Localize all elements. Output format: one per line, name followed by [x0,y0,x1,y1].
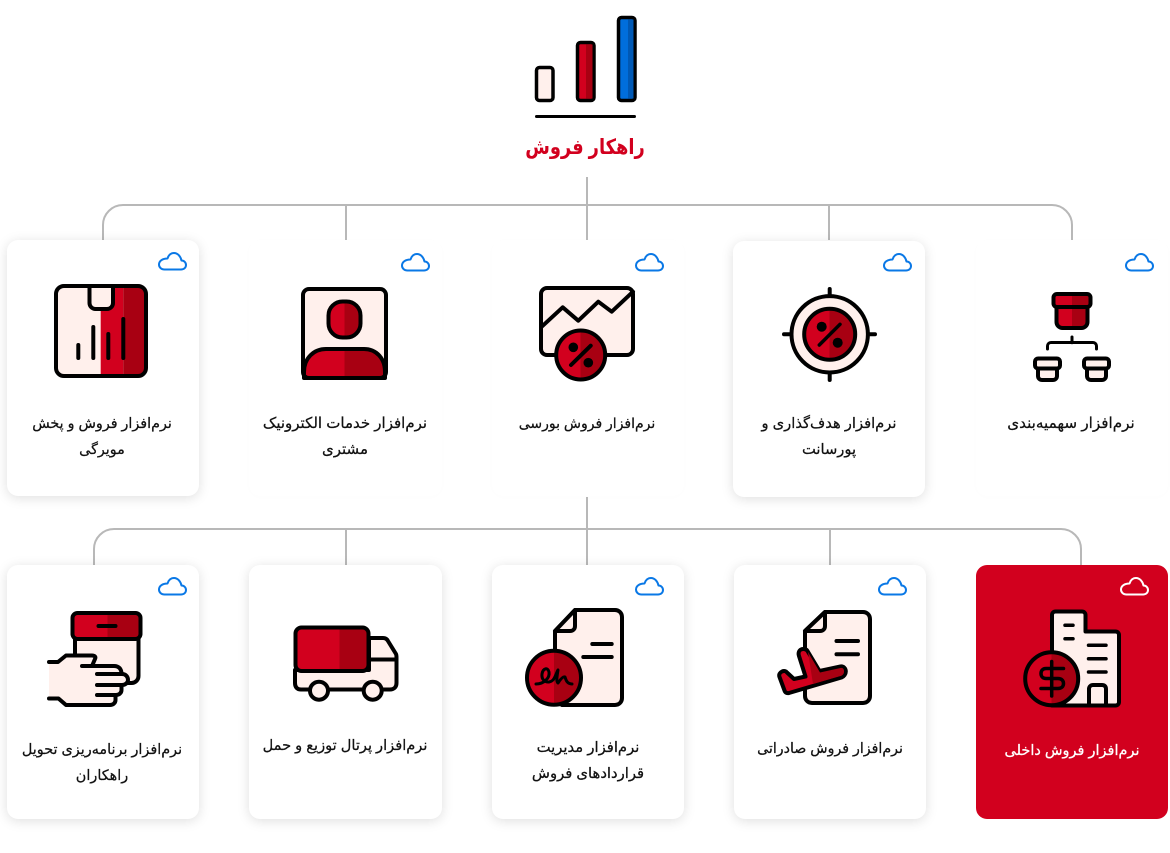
panel: customer e-services software [249,240,442,496]
label [760,414,896,458]
label [263,415,427,458]
icon: cloud [401,253,430,272]
label: نرم‌افزار برنامه‌ریزی تحویل [22,742,182,758]
label: قراردادهای فروش [532,766,644,782]
icon: document with airplane [777,610,872,705]
icon: cloud [635,577,664,596]
connector lines: top row [102,177,1073,240]
label: مویرگی [79,442,125,458]
icon: building with dollar coin [1023,610,1121,708]
icon: hand holding box [47,611,142,707]
label [532,740,644,782]
panel: quota allocation software [976,240,1168,496]
panel: stock exchange sales software [492,240,684,496]
label: نرم‌افزار مدیریت [537,740,639,756]
label: نرم‌افزار هدف‌گذاری و [762,416,896,432]
panel: domestic sales software, highlighted [976,565,1168,819]
icon: cloud [635,253,664,272]
icon: truck [293,626,398,702]
label [32,416,172,458]
label: نرم‌افزار فروش داخلی [1004,743,1140,759]
icon: cloud [158,252,187,270]
label: نرم‌افزار سهمیه‌بندی [1007,415,1135,432]
icon: cloud [883,253,912,272]
icon: hierarchy of boxes [1033,292,1111,382]
panel: sales contract management software [492,565,684,819]
label: نرم‌افزار فروش بورسی [519,415,655,431]
label [22,742,182,784]
label: راهکاران [76,768,128,784]
label: نرم‌افزار فروش صادراتی [757,741,903,757]
icon: cloud [158,577,187,596]
title: راهکار فروش [525,136,645,159]
label: نرم‌افزار پرتال توزیع و حمل [263,738,427,754]
icon: box with bars [54,284,148,378]
label: نرم‌افزار فروش و پخش [32,416,172,432]
icon: chart with percent [539,286,636,382]
label: مشتری [322,441,368,458]
panel: capillary sales software [7,240,199,496]
connector lines: bottom row [93,497,1082,565]
header: bar chart icon [534,16,637,118]
panel: target and commission software [733,241,925,497]
icon: cloud [878,577,907,596]
icon: signed document [525,608,624,707]
panel: export sales software [734,565,926,819]
label: پورسانت [802,442,856,458]
icon: percent target [782,287,877,382]
label: نرم‌افزار خدمات الکترونیک [263,415,427,432]
icon: customer profile [301,287,388,380]
panel: distribution and transport portal software [249,565,442,819]
icon: cloud [1125,253,1154,272]
icon: cloud [1120,577,1149,596]
panel: dealer delivery planning software [7,565,199,819]
